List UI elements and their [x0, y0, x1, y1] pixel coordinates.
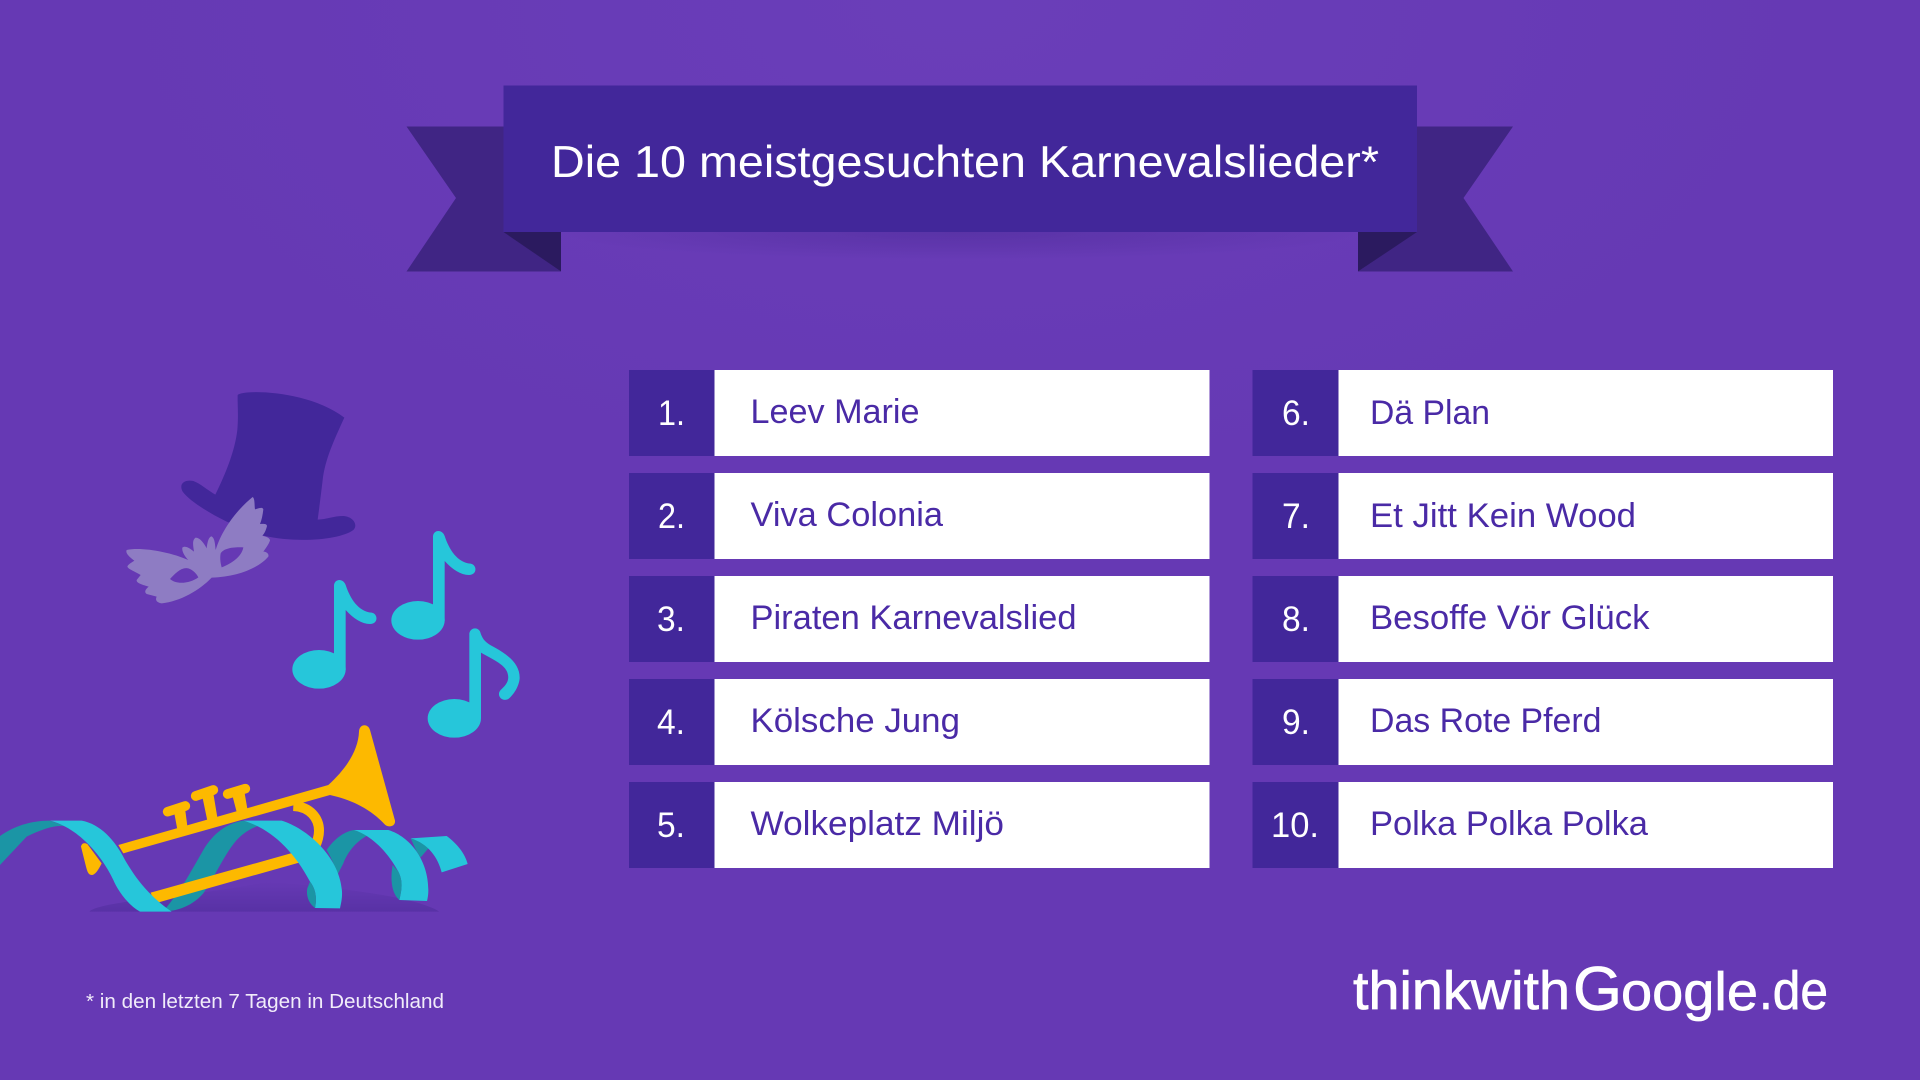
streamer inner curls	[307, 865, 402, 908]
logo: thinkwithGoogle.de	[1353, 955, 1828, 1024]
banner main panel	[504, 86, 1417, 232]
row 8: Besoffe Vör Glück	[1370, 599, 1650, 637]
streamer back segments	[0, 821, 428, 911]
right ribbon tail	[1358, 126, 1513, 272]
icon: top hat	[181, 392, 355, 540]
row 4	[629, 679, 1210, 765]
right ribbon fold	[1358, 232, 1417, 272]
row 9: Das Rote Pferd	[1370, 702, 1602, 740]
row 9	[1252, 679, 1833, 765]
ground shadow	[89, 882, 439, 912]
left ribbon fold	[504, 232, 561, 272]
row 1: 1.	[658, 394, 685, 433]
icon: music note 2	[391, 531, 475, 640]
row 4: Kölsche Jung	[750, 702, 960, 740]
row 10: 10.	[1271, 806, 1319, 845]
row 3: 3.	[657, 600, 685, 639]
list: right column	[1252, 370, 1833, 868]
row 5: 5.	[657, 806, 685, 845]
row 8	[1252, 576, 1833, 662]
row 6	[1252, 370, 1833, 456]
row 6: 6.	[1282, 394, 1310, 433]
streamer front segments	[50, 821, 468, 912]
left ribbon tail	[406, 126, 561, 272]
row 8: 8.	[1282, 600, 1310, 639]
list: left column	[629, 370, 1210, 868]
row 7: Et Jitt Kein Wood	[1370, 497, 1636, 535]
trumpet	[81, 725, 395, 903]
row 1	[629, 370, 1210, 456]
banner	[406, 86, 1513, 272]
row 7: 7.	[1282, 497, 1310, 536]
icon: music note 3	[428, 628, 520, 738]
row 2: Viva Colonia	[750, 496, 944, 534]
row 4: 4.	[657, 703, 685, 742]
row 6: Dä Plan	[1370, 394, 1490, 432]
row 1: Leev Marie	[750, 393, 920, 431]
logo: thinkwithGoogle.de: G	[1573, 955, 1622, 1024]
banner shadow	[560, 204, 1360, 260]
row 9: 9.	[1282, 703, 1310, 742]
row 7	[1252, 473, 1833, 559]
icon: carnival mask	[126, 497, 270, 603]
icon: top hat, mask and music notes	[126, 392, 520, 738]
title: Die 10 meistgesuchten Karnevalslieder*	[551, 138, 1379, 187]
icon: trumpet with streamer	[0, 725, 468, 912]
row 3	[629, 576, 1210, 662]
row 3: Piraten Karnevalslied	[750, 599, 1076, 637]
logo: thinkwithGoogle.de: thinkwith	[1353, 961, 1570, 1021]
row 5	[629, 782, 1210, 868]
footnote: * in den letzten 7 Tagen in Deutschland	[86, 991, 444, 1013]
logo: thinkwithGoogle.de: .de	[1759, 961, 1828, 1021]
icon: music note 1	[292, 580, 376, 689]
row 5: Wolkeplatz Miljö	[750, 805, 1004, 843]
logo: thinkwithGoogle.de: oogle	[1621, 962, 1758, 1022]
row 2	[629, 473, 1210, 559]
row 10	[1252, 782, 1833, 868]
row 2: 2.	[658, 497, 685, 536]
row 10: Polka Polka Polka	[1370, 805, 1649, 843]
